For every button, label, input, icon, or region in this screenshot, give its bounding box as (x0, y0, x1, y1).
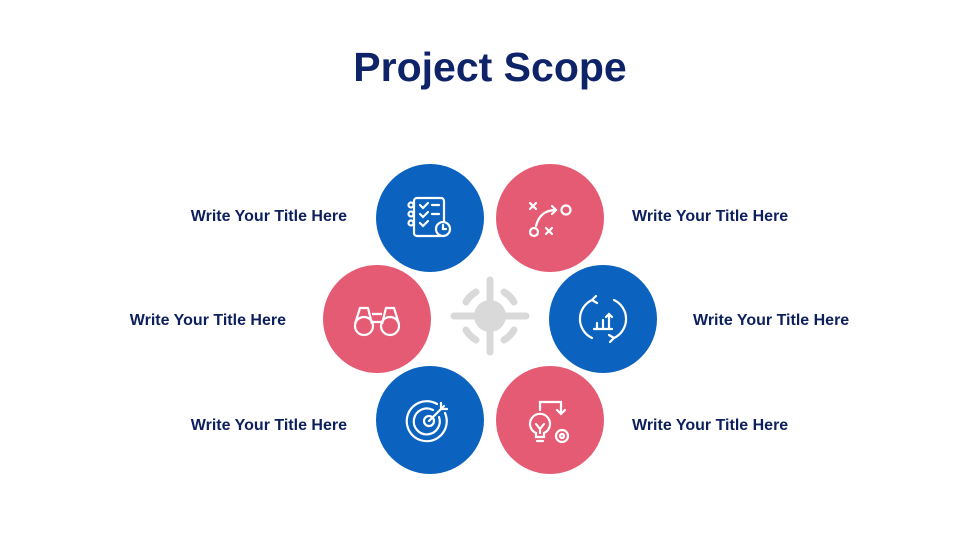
label: middle right: Write Your Title Here (693, 312, 849, 329)
circle: checklist (blue) (376, 164, 484, 272)
label: bottom left: Write Your Title Here (191, 417, 347, 434)
circle: idea to process (pink) (496, 366, 604, 474)
circle: growth cycle (blue) (549, 265, 657, 373)
title: Project Scope (353, 44, 627, 90)
circle: binoculars (pink) (323, 265, 431, 373)
label: top left: Write Your Title Here (191, 208, 347, 225)
circle: target (blue) (376, 366, 484, 474)
label: top right: Write Your Title Here (632, 208, 788, 225)
icon: center crosshair (454, 280, 526, 352)
circle: strategy (pink) (496, 164, 604, 272)
label: bottom right: Write Your Title Here (632, 417, 788, 434)
label: middle left: Write Your Title Here (130, 312, 286, 329)
